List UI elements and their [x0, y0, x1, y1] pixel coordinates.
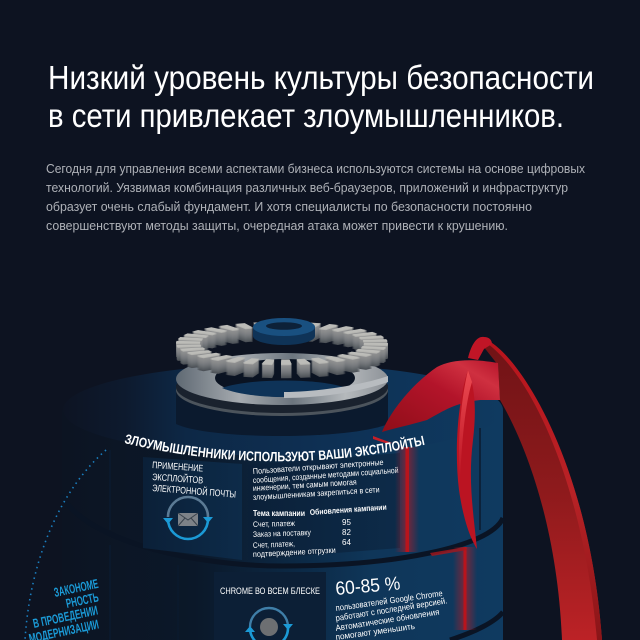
spike highlight: [459, 370, 472, 480]
ring hole: [215, 359, 355, 397]
table: 95: [342, 518, 351, 527]
panel: campaign text: [248, 453, 400, 560]
stat: 60-85 percent: работают с последней версией.: [335, 595, 448, 623]
icon: chrome cycle: [245, 608, 293, 640]
table: Счет, платеж,: [253, 539, 295, 550]
panel: email exploits: [143, 457, 242, 560]
red crack stripes: [373, 436, 477, 630]
steel ring: [176, 353, 388, 405]
knot: [468, 337, 492, 360]
gear teeth: [188, 324, 376, 376]
intro paragraph: совершенствуют методы защиты, очередная атака может привести к крушению.: [46, 219, 508, 233]
side label: regularity: В ПРОВЕДЕНИИ: [32, 603, 99, 631]
blue hub ring: [253, 318, 315, 345]
panel heading: ПРИМЕНЕНИЕ: [152, 460, 203, 475]
long ribbon: [483, 343, 602, 640]
side label: regularity: [28, 576, 100, 640]
dotted arc: [25, 450, 106, 640]
panel heading: [152, 460, 236, 501]
stat: 60-85 percent: Автоматические обновления: [335, 607, 440, 633]
ring gap: [284, 376, 388, 398]
description: злоумышленникам закрепиться в сети: [253, 485, 380, 502]
dark drum: [176, 385, 388, 436]
table: Заказ на поставку: [253, 528, 311, 539]
center spike: [457, 370, 477, 549]
table: Обновления кампании: [310, 503, 387, 517]
panel heading: ЭЛЕКТРОННОЙ ПОЧТЫ: [152, 482, 236, 501]
lower tier: [62, 480, 503, 640]
side label: regularity: РНОСТЬ: [65, 589, 100, 611]
icon: email cycle: [163, 497, 213, 539]
chrome heading: CHROME ВО ВСЕМ БЛЕСКЕ: [220, 586, 320, 596]
description: Пользователи открывают электронные: [253, 458, 384, 476]
table: 64: [342, 538, 351, 547]
stat: 60-85 percent: 60-85 %: [335, 573, 401, 600]
ribbon edge: [488, 343, 602, 640]
panel: chrome: [214, 572, 326, 640]
intro paragraph: Сегодня для управления всеми аспектами бизнеса используются системы на основе цифровых: [46, 162, 586, 176]
cylinder tower: [62, 364, 503, 640]
top surface: [63, 364, 503, 456]
panel seams: [110, 428, 480, 640]
gear hub base: [176, 353, 388, 436]
table: подтверждение отгрузки: [253, 546, 336, 559]
description: сообщения, созданные методами социальной: [253, 466, 399, 485]
title: в сети привлекает злоумышленников.: [48, 97, 564, 134]
lower shadow line: [450, 612, 503, 640]
intro paragraph: образует очень слабый фундамент. И хотя специалисты по безопасности постоянно: [46, 200, 532, 214]
tier shadow line: [62, 495, 503, 566]
intro paragraph: [46, 162, 586, 233]
title: Низкий уровень культуры безопасности: [48, 59, 594, 96]
heading: attackers use your exploits: ЗЛОУМЫШЛЕННИКИ ИСПОЛЬЗУЮТ ВАШИ ЭКСПЛОЙТЫ: [124, 434, 424, 462]
table: 82: [342, 528, 351, 537]
stat: 60-85 percent: пользователей Google Chrome: [335, 588, 443, 613]
side label: regularity: ЗАКОНОМЕ: [53, 576, 100, 600]
table: Счет, платеж: [253, 519, 296, 529]
panel heading: ЭКСПЛОЙТОВ: [152, 471, 204, 487]
table: [253, 503, 387, 559]
title: [48, 59, 594, 134]
lower plate layers: [176, 364, 388, 416]
description: инженерии, тем самым помогая: [253, 478, 357, 493]
description: [253, 458, 399, 502]
stat: 60-85 percent: [335, 573, 448, 640]
red ribbon: [382, 337, 602, 640]
intro paragraph: технологий. Уязвимая комбинация различных веб-браузеров, приложений и инфраструктур: [46, 181, 568, 195]
wing: [382, 360, 500, 432]
table: Тема кампании: [253, 509, 305, 518]
hole blue floor: [222, 380, 346, 397]
upper tier: [62, 410, 503, 566]
